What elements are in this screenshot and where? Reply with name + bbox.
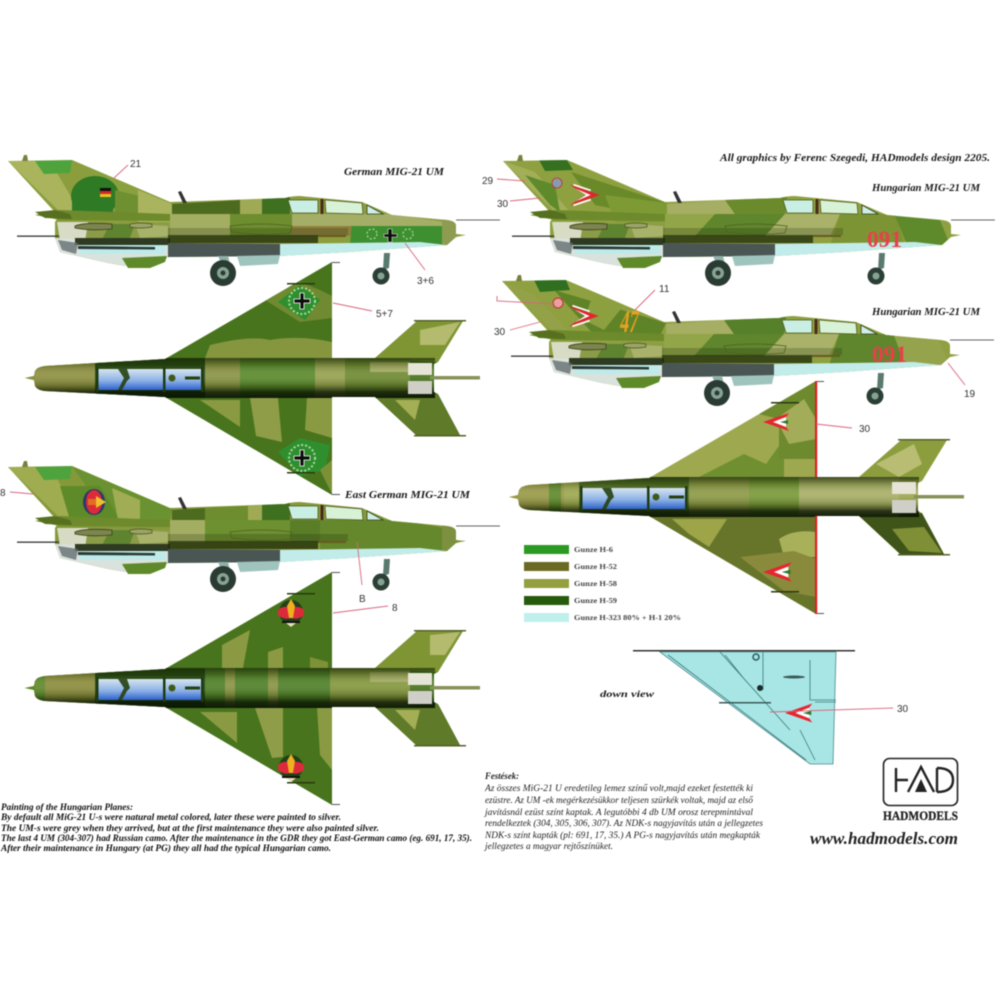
- legend: colour swatches: Gunze H-58: [574, 579, 617, 588]
- side view: Hungarian MIG-21 UM (upper): 091: [867, 227, 902, 252]
- logo: HADMODELS wordmark: HADMODELS: [883, 808, 958, 823]
- text block: painting notes in Hungarian: [484, 771, 763, 851]
- callout numbers: 8: [392, 603, 398, 614]
- text block: painting notes in English: Painting of the Hungarian Planes:: [1, 802, 133, 812]
- callout numbers: [0, 159, 976, 715]
- callout numbers: 3+6: [417, 276, 434, 287]
- callout numbers: 21: [130, 159, 142, 170]
- website address: www.hadmodels.com: [810, 829, 958, 848]
- text block: painting notes in English: After their maintenance in Hungary (at PG) they all had the typical Hungarian camo.: [0, 843, 331, 853]
- callout numbers: 30: [859, 424, 871, 435]
- side view: Hungarian MIG-21 UM (lower): 091: [872, 342, 907, 367]
- callout numbers: 11: [659, 284, 670, 295]
- text block: painting notes in English: By default all MiG-21 U-s were natural metal colored, later these were painted to silver.: [0, 812, 341, 822]
- callout numbers: 8: [0, 488, 6, 499]
- callout numbers: 29: [482, 176, 494, 187]
- annotation leader lines: [10, 165, 965, 712]
- callout numbers: 30: [497, 199, 509, 210]
- legend: colour swatches: Gunze H-323 80% + H-1 20%: [574, 613, 681, 622]
- side view: German MIG-21 UM: [0, 150, 500, 286]
- callout numbers: 30: [494, 327, 506, 338]
- top view: German MIG-21 UM: [24, 261, 481, 496]
- callout numbers: B: [359, 594, 366, 605]
- caption: down view: down view: [600, 689, 655, 699]
- legend: colour swatches: Gunze H-52: [574, 562, 617, 571]
- heading: Hungarian MIG-21 UM upper: Hungarian MIG-21 UM: [871, 183, 981, 194]
- side view: East German MIG-21 UM: [0, 456, 500, 592]
- text block: painting notes in English: The UM-s were grey when they arrived, but at the first maintenance they were also painted silver.: [1, 823, 379, 833]
- text block: painting notes in Hungarian: jellegzetes a magyar rejtőszínüket.: [484, 841, 613, 851]
- legend: colour swatches: [524, 545, 681, 622]
- heading: Hungarian MIG-21 UM lower: Hungarian MIG-21 UM: [871, 307, 981, 318]
- side view: Hungarian MIG-21 UM (upper): [495, 150, 995, 286]
- text block: painting notes in Hungarian: Festések:: [484, 771, 519, 781]
- top view: Hungarian MIG-21 UM: [508, 380, 965, 615]
- side view: Hungarian MIG-21 UM (lower): [494, 270, 994, 406]
- callout numbers: 5+7: [376, 309, 393, 320]
- text block: painting notes in Hungarian: javításnál ezüst színt kaptak. A legutóbbi 4 db UM orosz terepmintával: [484, 807, 754, 817]
- text block: painting notes in English: [0, 802, 472, 853]
- logo: HAD badge: [884, 758, 958, 806]
- text block: painting notes in Hungarian: ezüstre. Az UM -ek megérkezésükkor teljesen szürkék voltak, majd az első: [485, 795, 753, 805]
- heading: credits: All graphics by Ferenc Szegedi, HADmodels design 2205.: [719, 153, 990, 164]
- text block: painting notes in Hungarian: Az összes MiG-21 U eredetileg lemez színű volt,majd ezeket festették ki: [484, 783, 754, 793]
- heading: German MIG-21 UM: German MIG-21 UM: [344, 167, 445, 178]
- top view: East German MIG-21 UM: [24, 571, 481, 806]
- panel: wing down view: [633, 650, 855, 764]
- legend: colour swatches: Gunze H-59: [574, 596, 617, 605]
- callout numbers: 30: [897, 704, 909, 715]
- text block: painting notes in English: The last 4 UM (304-307) had Russian camo. After the maintenance in the GDR they got East-German camo (eg. 691, 17, 35).: [1, 833, 472, 843]
- heading: East German MIG-21 UM: East German MIG-21 UM: [344, 490, 471, 501]
- side view: Hungarian MIG-21 UM (lower): 47: [618, 303, 641, 339]
- legend: colour swatches: Gunze H-6: [574, 545, 613, 554]
- text block: painting notes in Hungarian: rendelkeztek (304, 305, 306, 307). Az NDK-s nagyjavítás után a jellegzetes: [485, 818, 763, 828]
- text block: painting notes in Hungarian: NDK-s színt kapták (pl: 691, 17, 35.) A PG-s nagyjavítás után megkapták: [484, 830, 761, 840]
- callout numbers: 19: [964, 389, 976, 400]
